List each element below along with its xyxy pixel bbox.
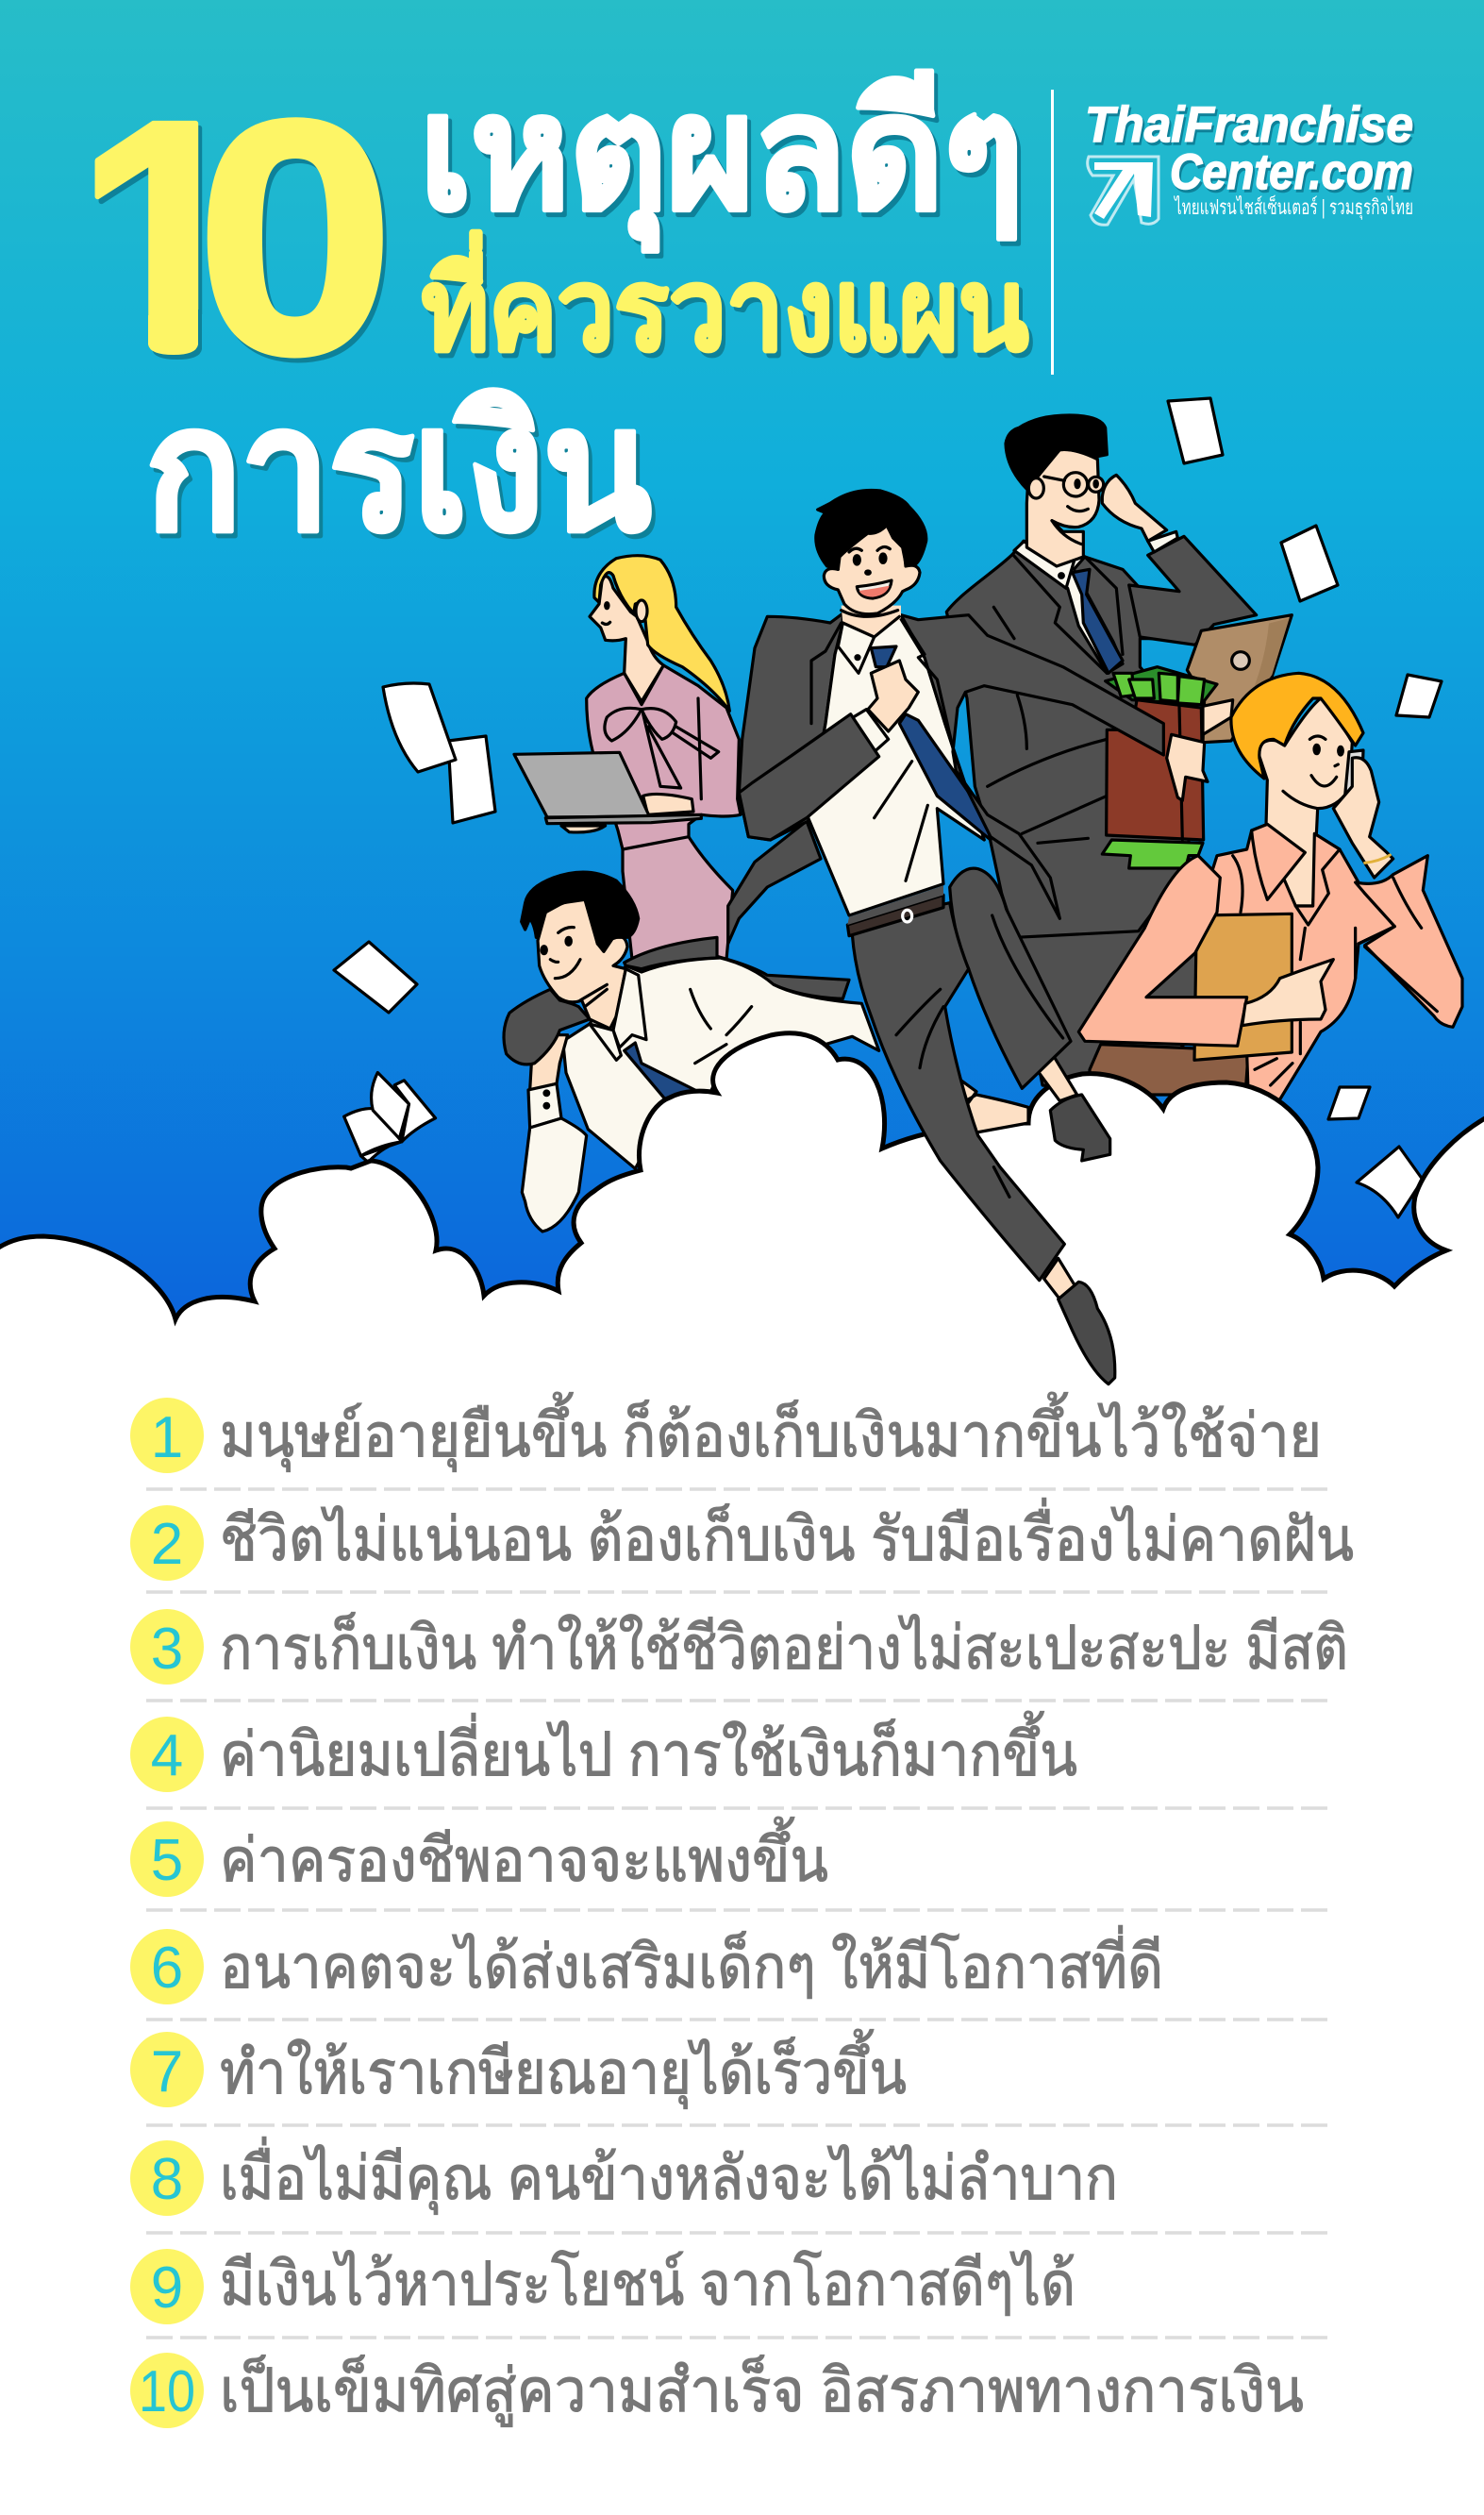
her skirt — [1090, 1045, 1248, 1095]
her collar — [1252, 824, 1305, 899]
reason 4: 4 — [151, 1723, 183, 1788]
reason 5: 5 — [151, 1828, 183, 1893]
reason 6: อนาคตจะได้ส่งเสริมเด็กๆ ให้มีโอกาสที่ดี — [220, 1925, 1163, 2001]
title line: reasons: เหตุผลดีๆ — [420, 64, 1024, 252]
reason 5: ค่าครองชีพอาจจะแพงขึ้น — [220, 1817, 828, 1894]
jacket left panel — [739, 613, 842, 840]
hand on envelope — [1167, 734, 1208, 800]
his collar — [1014, 542, 1074, 588]
reason 4: ค่านิยมเปลี่ยนไป การใช้เงินก็มากขึ้น — [220, 1711, 1077, 1788]
reason 1: มนุษย์อายุยืนขึ้น ก็ต้องเก็บเงินมากขึ้นไว้ใช้จ่าย — [220, 1392, 1322, 1472]
head — [816, 490, 926, 616]
title line: finance: การเงิน — [146, 376, 651, 565]
collar — [838, 623, 875, 673]
reason 7: ทำให้เราเกษียณอายุได้เร็วขึ้น — [220, 2029, 907, 2109]
hand on tie — [868, 661, 918, 731]
his hand at glasses — [1102, 475, 1167, 541]
logo wordmark: ThaiFranchise — [1085, 97, 1413, 153]
shirt cuff — [851, 710, 889, 752]
extended trouser leg — [849, 903, 1064, 1281]
her neck and face — [1258, 698, 1352, 906]
logo arrow icon — [1088, 157, 1159, 225]
his face — [538, 899, 627, 1029]
money envelope — [1102, 667, 1217, 868]
his jacket — [946, 541, 1195, 937]
laptop behind — [1187, 615, 1292, 743]
reason 3: 3 — [151, 1617, 183, 1682]
his necktie — [1073, 569, 1123, 673]
title number 10: 1 — [75, 51, 256, 423]
his necktie — [625, 1043, 695, 1101]
her hand at phone — [1333, 758, 1393, 878]
divider beside title — [1051, 90, 1054, 375]
reason 8: 8 — [151, 2147, 183, 2212]
reason 10: เป็นเข็มทิศสู่ความสำเร็จ อิสรภาพทางการเงิน — [220, 2356, 1304, 2427]
gap behind arm — [1144, 950, 1198, 1003]
reason 3: การเก็บเงิน ทำให้ใช้ชีวิตอย่างไม่สะเปะสะปะ มีสติ — [220, 1613, 1348, 1682]
necktie — [871, 646, 991, 840]
his raised arm — [1129, 536, 1257, 645]
ankles — [1038, 1050, 1077, 1101]
logo: ThaiFranchise Center.com — [1085, 97, 1413, 225]
her face — [590, 577, 663, 701]
his sleeve around neck — [504, 989, 590, 1065]
her folder — [1194, 914, 1292, 1060]
reason 7: 7 — [151, 2039, 183, 2104]
reason 5 — [130, 1817, 828, 1897]
his jacket — [625, 937, 849, 998]
his shirt cuff — [528, 1083, 561, 1128]
icon: open book — [344, 1073, 436, 1162]
his hair — [522, 872, 639, 951]
belt — [847, 885, 943, 936]
reason 6: 6 — [151, 1936, 183, 2001]
jacket right panel — [901, 615, 1163, 918]
background: blue gradient sky — [0, 0, 1484, 1340]
character: woman with phone — [1078, 673, 1462, 1099]
shoes — [1050, 1095, 1110, 1161]
her left arm — [1078, 856, 1247, 1046]
reasons list — [130, 1392, 1354, 2428]
his forearm — [522, 1118, 587, 1232]
sleeve — [739, 714, 879, 840]
neck — [842, 606, 901, 637]
reason 10: 10 — [139, 2359, 195, 2424]
jacket tail left — [728, 821, 821, 944]
her right sleeve — [1356, 856, 1462, 1027]
her phone — [1344, 750, 1363, 802]
reason 9: 9 — [151, 2255, 183, 2321]
character: main man in suit — [728, 490, 1208, 1384]
cloud — [0, 1033, 1484, 1387]
his shirt — [563, 958, 879, 1168]
character: man with glasses — [946, 415, 1292, 1095]
her blouse torso — [1198, 824, 1394, 1099]
his trousers — [1019, 925, 1191, 1095]
his shirt — [1024, 541, 1123, 673]
reason 1: 1 — [151, 1405, 183, 1470]
reason 7 — [130, 2029, 907, 2109]
reason 8: เมื่อไม่มีคุณ คนข้างหลังจะได้ไม่ลำบาก — [220, 2137, 1118, 2215]
her hair — [594, 556, 729, 711]
shirt — [809, 616, 984, 915]
her ribbon — [605, 665, 719, 799]
her hair — [1231, 673, 1363, 779]
reason 2: 2 — [151, 1512, 183, 1577]
title line: should plan: ที่ควรวางแผน — [422, 230, 1028, 374]
character: blonde woman with laptop — [514, 556, 741, 960]
flying paper sheets — [334, 398, 1442, 1217]
title — [75, 51, 1028, 565]
raised trouser leg — [950, 868, 1071, 1088]
title number 10 — [94, 117, 387, 362]
character: man lying on cloud — [504, 872, 879, 1232]
dashed separators — [146, 1489, 1327, 2338]
his head — [1026, 449, 1099, 566]
bare foot — [959, 1079, 1028, 1132]
her hand on folder — [1242, 960, 1333, 1026]
logo wordmark second line: Center.com — [1170, 144, 1413, 200]
reason 9: มีเงินไว้หาประโยชน์ จากโอกาสดีๆได้ — [220, 2250, 1075, 2318]
his collar — [613, 969, 646, 1048]
her laptop — [514, 752, 649, 817]
his hand — [530, 1035, 568, 1090]
reason 2: ชีวิตไม่แน่นอน ต้องเก็บเงิน รับมือเรื่องไม่คาดฝัน — [220, 1498, 1354, 1573]
title number 10: 0 — [196, 51, 394, 423]
